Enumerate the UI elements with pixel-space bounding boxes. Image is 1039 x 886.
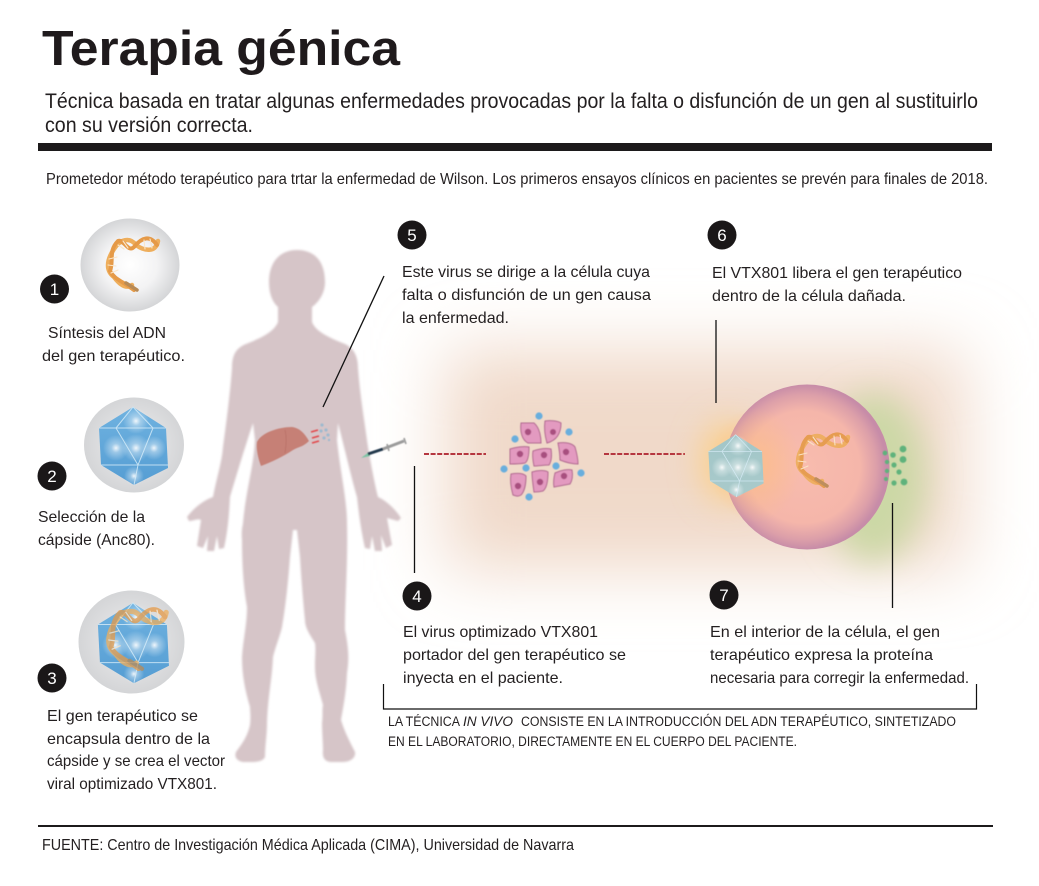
in vivo note: EN EL LABORATORIO, DIRECTAMENTE EN EL CUERPO DEL PACIENTE.: [388, 734, 797, 749]
in vivo note: CONSISTE EN LA INTRODUCCIÓN DEL ADN TERAPÉUTICO, SINTETIZADO: [521, 714, 956, 729]
in vivo note: IN VIVO: [463, 714, 513, 729]
in vivo note: [388, 714, 956, 749]
step 3: 3: [47, 669, 57, 688]
step 7: [710, 580, 969, 687]
in vivo note: LA TÉCNICA: [388, 714, 460, 729]
liver: [257, 427, 309, 466]
title: Terapia génica: [42, 22, 401, 76]
subtitle: [45, 89, 978, 137]
step 3: El gen terapéutico se: [47, 708, 198, 725]
step 2: 2: [47, 467, 57, 486]
step 6: 6: [717, 226, 727, 245]
step 7: En el interior de la célula, el gen: [710, 624, 940, 641]
red arrows toward liver: [311, 430, 319, 443]
target cell: [709, 384, 890, 550]
step 5: Este virus se dirige a la célula cuya: [402, 264, 650, 281]
step 5: 5: [407, 226, 417, 245]
step 1: 1: [50, 280, 59, 299]
green protein dots: [883, 446, 907, 486]
subtitle: con su versión correcta.: [45, 113, 253, 137]
source: FUENTE: Centro de Investigación Médica Aplicada (CIMA), Universidad de Navarra: [42, 837, 574, 854]
step 6: [708, 220, 962, 305]
step 5: falta o disfunción de un gen causa: [402, 287, 651, 304]
bracket: [384, 684, 976, 709]
step 7: 7: [719, 586, 729, 605]
leader line: step 6: [715, 320, 717, 403]
leader line: step 5: [323, 276, 384, 407]
icon: capsid with DNA sphere: [78, 590, 184, 694]
step 3: viral optimizado VTX801.: [47, 776, 217, 793]
step 4: portador del gen terapéutico se: [403, 647, 626, 664]
step 7: terapéutico expresa la proteína: [710, 647, 933, 664]
intro text: Prometedor método terapéutico para trtar la enfermedad de Wilson. Los primeros ensayos clínicos en pacientes se prevén para finales de 2018.: [46, 171, 988, 188]
step 3: cápside y se crea el vector: [47, 753, 226, 770]
red dashed arrows: [424, 453, 685, 455]
step 6: El VTX801 libera el gen terapéutico: [712, 265, 962, 282]
step 2: cápside (Anc80).: [38, 532, 155, 549]
step 1: Síntesis del ADN: [48, 325, 166, 342]
step 7: necesaria para corregir la enfermedad.: [710, 670, 969, 687]
step 5: [398, 220, 651, 327]
step 4: 4: [412, 587, 422, 606]
icon: syringe: [361, 438, 406, 458]
green protein glow: [822, 394, 926, 562]
icon: virus capsid on cell: [708, 435, 764, 498]
step 4: [402, 582, 626, 687]
step 4: inyecta en el paciente.: [403, 670, 563, 687]
step 2: Selección de la: [38, 509, 145, 526]
step 3: [38, 590, 226, 793]
background glow: [445, 350, 965, 570]
cell cluster: [500, 412, 585, 501]
icon: DNA sphere: [80, 218, 180, 312]
step 1: del gen terapéutico.: [42, 348, 185, 365]
step 2: [38, 398, 184, 549]
leader line: step 4: [414, 466, 416, 573]
step 6: dentro de la célula dañada.: [712, 288, 906, 305]
step 1: [40, 218, 185, 365]
leader line: step 7: [892, 503, 894, 608]
step 5: la enfermedad.: [402, 310, 509, 327]
human body silhouette: [187, 250, 401, 762]
blue viruses near liver: [319, 423, 330, 441]
step 3: encapsula dentro de la: [47, 731, 210, 748]
icon: DNA inside cell: [798, 434, 848, 486]
icon: capsid sphere: [84, 398, 184, 492]
yellow glow behind virus: [702, 422, 754, 502]
step 4: El virus optimizado VTX801: [403, 624, 598, 641]
